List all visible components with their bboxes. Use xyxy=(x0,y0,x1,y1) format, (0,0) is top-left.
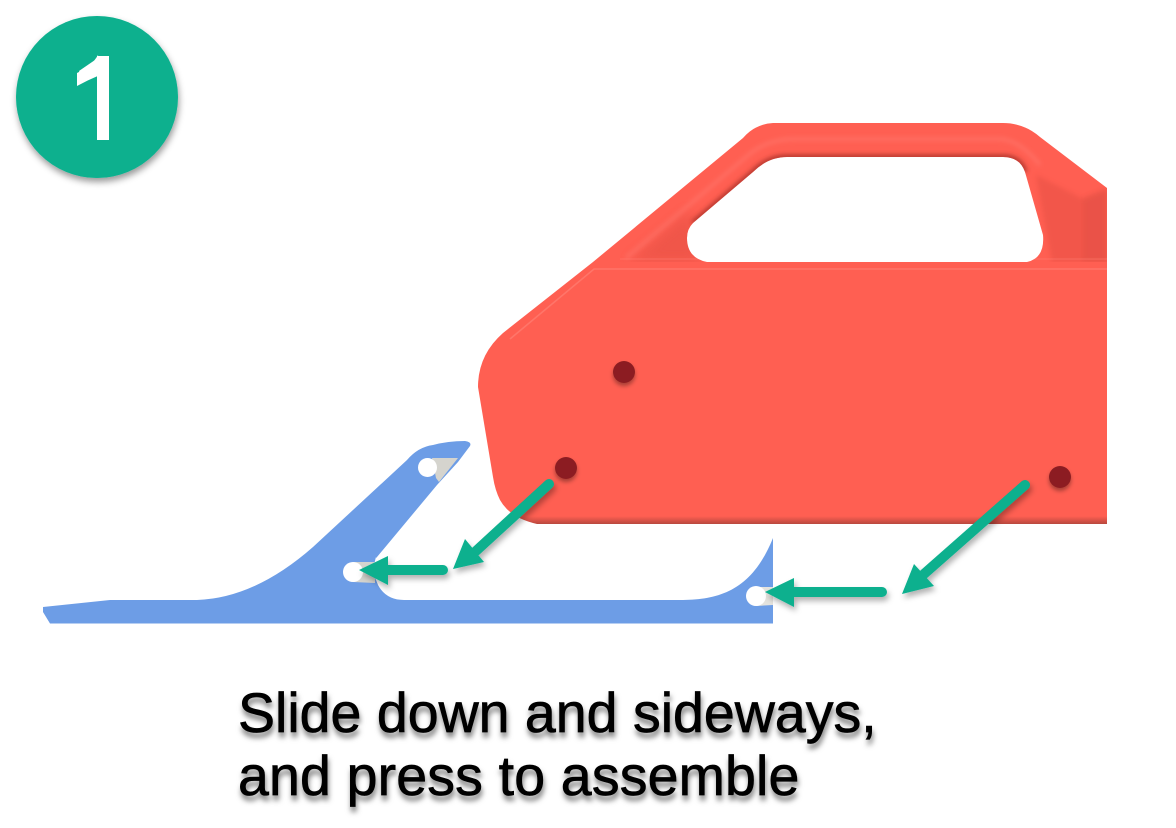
pin: lower right xyxy=(1049,466,1071,488)
arrow: into end slot xyxy=(765,578,882,607)
arrow: pin to end slot, diagonal xyxy=(902,485,1025,594)
arrow: into middle slot xyxy=(359,556,443,585)
arrow: pin to middle slot, diagonal xyxy=(453,484,549,569)
step number badge xyxy=(16,16,178,178)
middle slot xyxy=(343,557,384,584)
door part xyxy=(478,120,1110,524)
blue rail part xyxy=(43,441,773,624)
end slot xyxy=(746,586,773,606)
rail profile xyxy=(43,441,773,624)
pin: upper left xyxy=(613,361,635,383)
door body xyxy=(478,262,1107,524)
instruction text xyxy=(238,682,877,807)
door handle frame xyxy=(590,120,1110,265)
door body highlight xyxy=(510,269,1107,339)
instruction text: and press to assemble xyxy=(238,745,800,807)
instruction text: Slide down and sideways, xyxy=(238,682,877,744)
pin: lower left xyxy=(555,457,577,479)
step number badge: 1 xyxy=(68,32,134,166)
upper slot xyxy=(418,458,458,482)
